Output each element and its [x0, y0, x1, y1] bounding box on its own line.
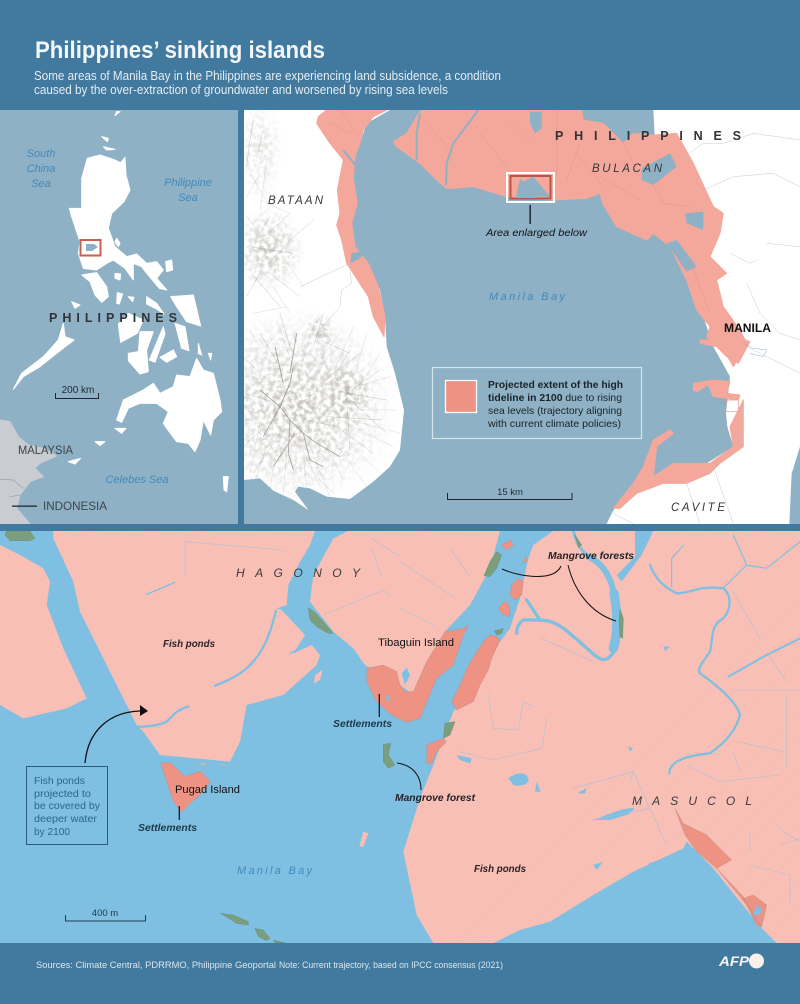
title: Philippines’ sinking islands [35, 37, 325, 64]
hatched fish pond areas [0, 531, 800, 943]
panel: Hagonoy close-up map [0, 531, 800, 943]
neighbouring country labels: MALAYSIA [18, 443, 73, 457]
neighbouring country labels: INDONESIA [43, 499, 107, 513]
sea labels: Sea [178, 192, 198, 204]
city label: Manila: MANILA [724, 323, 771, 335]
mangrove callouts: Mangrove forests [548, 551, 634, 562]
Manila Bay label: Manila Bay [489, 291, 566, 303]
region labels: CAVITE [671, 502, 725, 514]
legend [432, 368, 642, 438]
fish ponds labels: Fish ponds [474, 864, 526, 875]
water inlets and rivers in the flood zone [343, 110, 478, 185]
salt ponds at Cavite [725, 400, 738, 412]
enlarged area box [507, 173, 554, 202]
small water cut-outs [385, 668, 762, 915]
leader line and caption: area enlarged: Area enlarged below [485, 228, 588, 239]
Malaysia and Indonesia land [0, 420, 57, 524]
projected high tideline extent [317, 110, 750, 508]
country label: PHILIPPINES [49, 311, 177, 325]
legend: sea levels (trajectory aligning [488, 406, 622, 417]
scale bar: 200 km: 200 km [62, 385, 94, 396]
small pond islands [197, 762, 226, 766]
callout box: projected to [34, 788, 91, 800]
panel: locator map [0, 110, 238, 524]
scale bar: 15 km: 15 km [497, 487, 523, 498]
callout box: Fish ponds [34, 775, 85, 787]
region labels: BULACAN [592, 163, 663, 175]
settlements [161, 540, 767, 928]
place labels: MASUCOL [632, 794, 752, 808]
legend: Projected extent of the high [488, 380, 623, 391]
mangrove callouts [395, 551, 634, 804]
scale bar: 400 m: 400 m [92, 908, 118, 919]
callout box: deeper water [34, 813, 98, 825]
terrain of Bataan [244, 110, 400, 496]
AFP logo [718, 953, 764, 969]
thin drains [185, 538, 800, 905]
scale bar: 200 km [56, 385, 98, 398]
right side water patch [789, 447, 800, 524]
sea labels: Celebes Sea [106, 474, 168, 486]
mangrove callouts: Mangrove forest [395, 793, 476, 804]
top wedge inlet [617, 531, 653, 582]
island labels: Pugad Island [175, 784, 240, 796]
neighbouring country labels [18, 443, 107, 513]
leader line and caption: area enlarged [485, 205, 588, 239]
footer text [36, 960, 503, 970]
bay water [244, 110, 733, 524]
callout box: be covered by [34, 800, 101, 812]
place labels [236, 566, 752, 808]
rivers on land [340, 133, 800, 524]
callout box: by 2100 [34, 826, 70, 838]
island labels: Tibaguin Island [378, 637, 454, 649]
sea labels: China [27, 163, 55, 175]
region labels [268, 163, 725, 514]
country label: PHILIPPINES [555, 129, 741, 143]
scale bar: 15 km [448, 487, 572, 500]
fish ponds labels [163, 639, 526, 875]
Manila river [743, 343, 767, 357]
mangroves [5, 531, 623, 943]
island labels [175, 637, 454, 796]
region labels: BATAAN [268, 195, 324, 207]
subtitle: caused by the over-extraction of groundwater and worsened by rising sea levels [34, 83, 448, 97]
islands of the Philippines [0, 112, 228, 524]
AFP logo: AFP [718, 953, 750, 969]
callout box [26, 766, 108, 844]
legend: tideline in 2100 due to rising [488, 393, 622, 404]
sea labels [27, 148, 212, 486]
Manila Bay label: Manila Bay [237, 865, 314, 877]
settlements callouts: Settlements [333, 719, 392, 730]
fine channels [330, 110, 710, 313]
footer text: Sources: Climate Central, PDRRMO, Philippine Geoportal [36, 960, 276, 970]
sea labels: South [27, 148, 55, 160]
ponds [456, 646, 670, 870]
footer text: Note: Current trajectory, based on IPCC consensus (2021) [279, 960, 503, 970]
indicator line for Indonesia [12, 506, 37, 507]
subtitle [34, 69, 501, 97]
sea labels: Sea [31, 178, 51, 190]
location box: Manila Bay [80, 240, 100, 256]
fish ponds labels: Fish ponds [163, 639, 215, 650]
place labels: HAGONOY [236, 566, 361, 580]
legend: with current climate policies) [487, 419, 621, 430]
sea labels: Philippine [164, 177, 212, 189]
panel: Manila Bay map [244, 110, 800, 524]
subtitle: Some areas of Manila Bay in the Philippines are experiencing land subsidence, a condition [34, 69, 501, 83]
settlements callouts [138, 694, 392, 834]
channels through the ponds [138, 531, 800, 773]
settlements callouts: Settlements [138, 823, 197, 834]
callout arrow [85, 705, 148, 763]
scale bar: 400 m [66, 908, 146, 921]
